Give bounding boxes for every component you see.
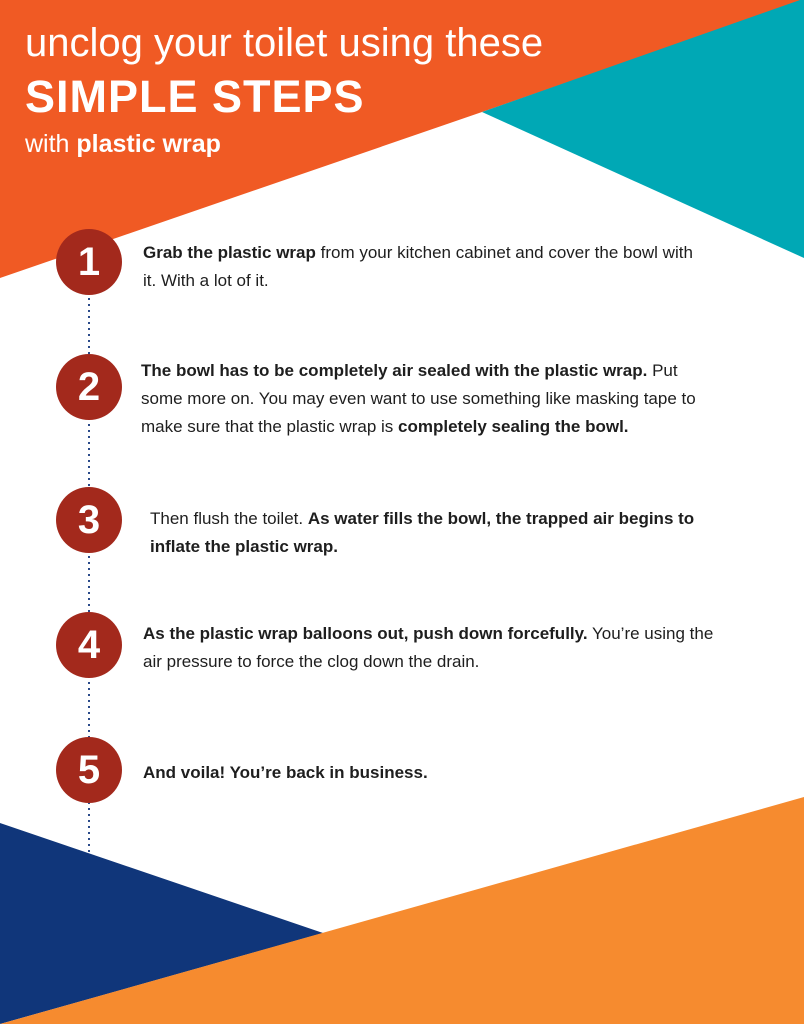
step 4: As the plastic wrap balloons out, push down forcefully. You’re using the air pressure to force the clog down the drain. — [143, 624, 713, 671]
title: SIMPLE STEPS — [25, 71, 365, 122]
step 2: 2 — [78, 365, 100, 409]
step 1 — [56, 229, 693, 295]
step 5: And voila! You’re back in business. — [143, 763, 428, 782]
step 5 — [56, 737, 428, 803]
step 4 — [56, 612, 713, 678]
title: unclog your toilet using these — [25, 21, 543, 65]
step 2: The bowl has to be completely air sealed with the plastic wrap. Put some more on. You may even want to use something like masking tape to make sure that the plastic wrap is completely sealing the bowl. — [141, 361, 696, 436]
step 4: 4 — [78, 623, 100, 667]
title: with plastic wrap — [25, 130, 221, 158]
step 1: Grab the plastic wrap from your kitchen cabinet and cover the bowl with it. With a lot of it. — [143, 243, 693, 290]
step 3 — [56, 487, 694, 556]
step 3: Then flush the toilet. As water fills the bowl, the trapped air begins to inflate the plastic wrap. — [150, 509, 694, 556]
title — [25, 21, 543, 158]
step 5: 5 — [78, 748, 100, 792]
step 1: 1 — [78, 240, 100, 284]
step 3: 3 — [78, 498, 100, 542]
